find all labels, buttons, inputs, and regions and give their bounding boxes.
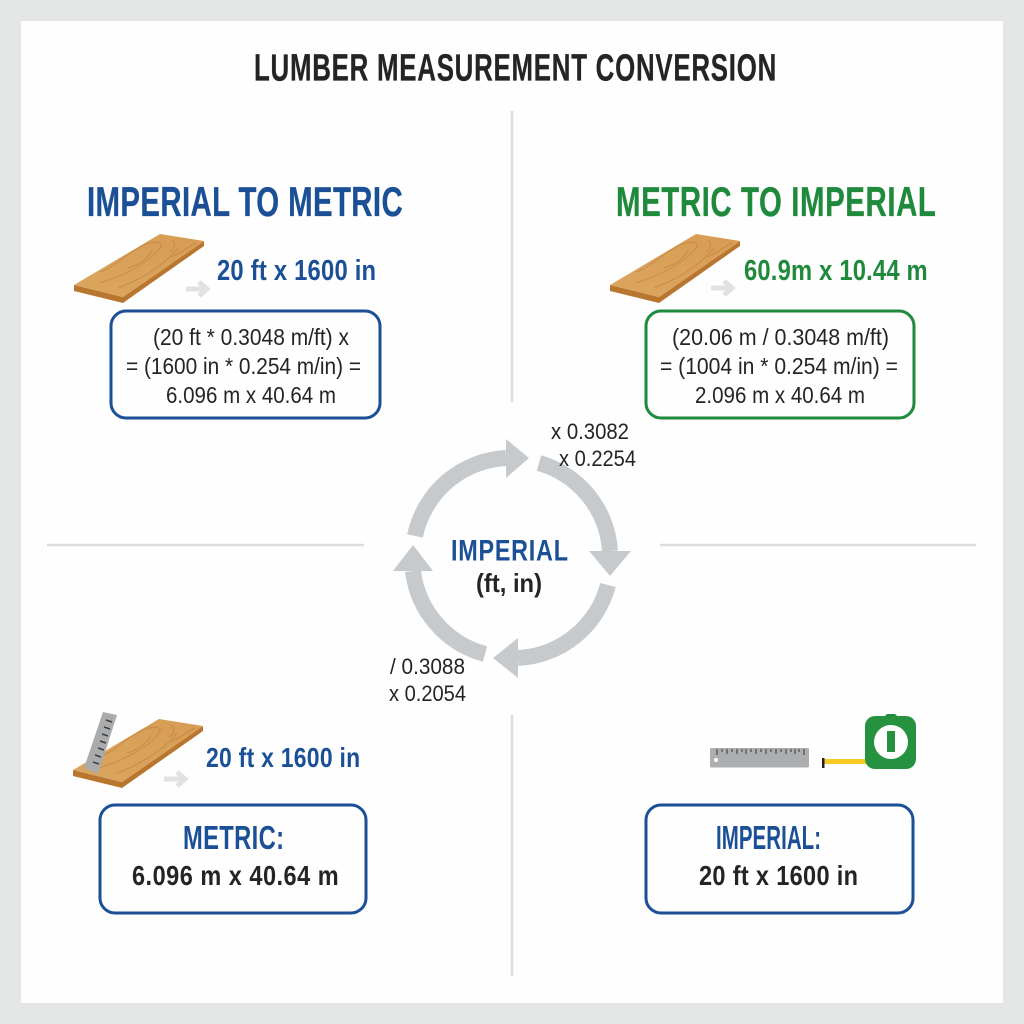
icon: tape measure (822, 714, 916, 769)
title: LUMBER MEASUREMENT CONVERSION (254, 47, 776, 89)
result box (100, 805, 366, 913)
formula box: = (1600 in * 0.254 m/in) = (126, 353, 361, 379)
icon: wood plank (74, 234, 204, 303)
formula box (646, 311, 914, 418)
arrow: top left (415, 439, 529, 536)
result box: METRIC: (183, 820, 284, 857)
heading: metric to imperial: METRIC TO IMPERIAL (616, 178, 936, 225)
panel: imperial to metric (74, 178, 403, 418)
panel: metric result (73, 712, 366, 913)
formula box: (20.06 m / 0.3048 m/ft) (672, 324, 889, 350)
dimensions: 20 ft x 1600 in (206, 743, 360, 774)
icon: ruler (710, 748, 809, 768)
factors: top right: x 0.2254 (559, 446, 636, 471)
cycle diagram (389, 419, 636, 706)
factors: bottom left: / 0.3088 (390, 654, 465, 679)
arrow (711, 281, 732, 295)
arrow: bottom right (493, 585, 608, 678)
panel: metric to imperial (610, 178, 936, 418)
arrow (186, 282, 207, 296)
result box: IMPERIAL: (716, 819, 821, 856)
result box: 6.096 m x 40.64 m (132, 861, 339, 891)
heading: imperial to metric: IMPERIAL TO METRIC (87, 178, 403, 225)
center label: imperial: IMPERIAL (451, 534, 568, 567)
factors: top right (551, 419, 636, 471)
center label: units: (ft, in) (476, 568, 542, 598)
panel: imperial result (646, 714, 916, 913)
factors: bottom left (389, 654, 466, 706)
factors: bottom left: x 0.2054 (389, 681, 466, 706)
arrow: bottom left (393, 545, 485, 654)
formula box: 2.096 m x 40.64 m (695, 382, 865, 408)
formula box: (20 ft * 0.3048 m/ft) x (153, 324, 349, 350)
arrow: top right (539, 463, 631, 576)
icon: plank with ruler (73, 712, 203, 788)
formula box (111, 311, 380, 418)
dividers (47, 111, 976, 976)
factors: top right: x 0.3082 (551, 419, 629, 444)
dimensions: 60.9m x 10.44 m (744, 254, 928, 287)
result box: 20 ft x 1600 in (699, 861, 858, 891)
result box (646, 805, 913, 913)
formula box: = (1004 in * 0.254 m/in) = (660, 353, 898, 379)
dimensions: 20 ft x 1600 in (217, 254, 376, 287)
arrow (164, 772, 185, 786)
icon: wood plank (610, 234, 740, 303)
formula box: 6.096 m x 40.64 m (166, 382, 336, 408)
